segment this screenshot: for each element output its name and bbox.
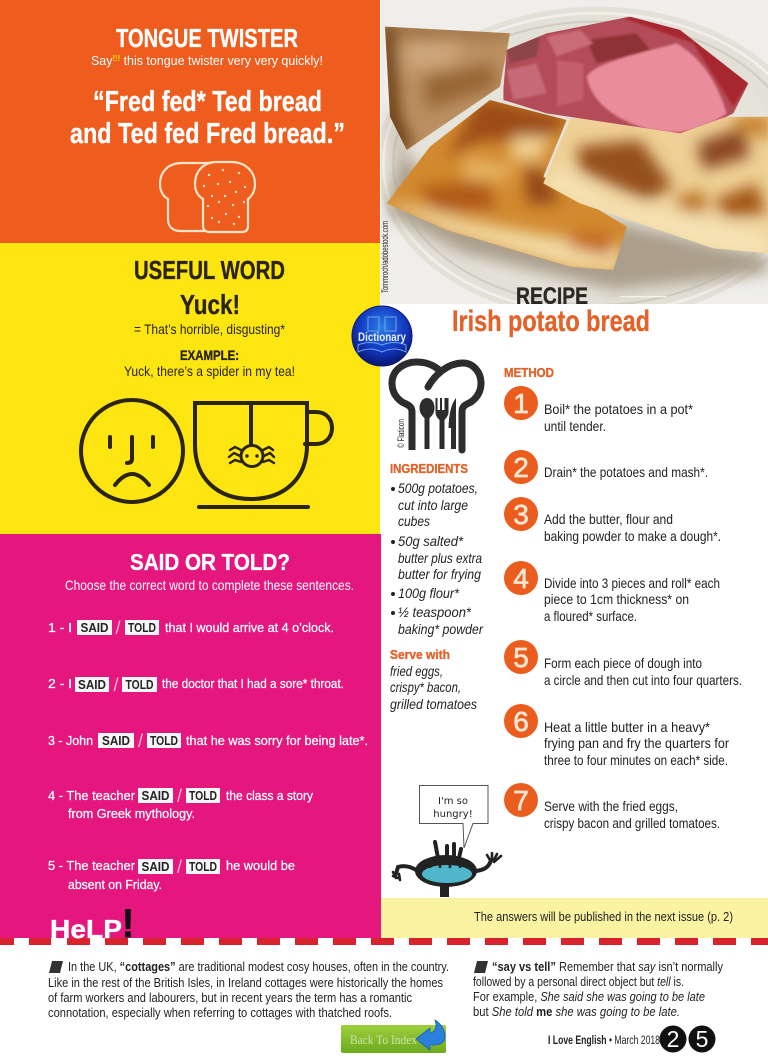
panel: method	[504, 365, 742, 831]
ingredient list: butter for frying	[398, 566, 481, 582]
sentence 1	[48, 618, 334, 638]
heading: ingredients: INGREDIENTS	[390, 461, 468, 476]
panel: tongue twister	[0, 0, 380, 243]
recipe label: RECIPE	[516, 283, 588, 310]
serve with: fried eggs,	[390, 663, 443, 679]
step 1	[504, 386, 693, 434]
sentence 4: /	[177, 786, 182, 806]
word: yuck: Yuck!	[180, 289, 240, 320]
photo: irish potato bread with bacon and toast	[377, 0, 768, 320]
fork	[436, 398, 448, 449]
step 4: a floured* surface.	[544, 608, 637, 624]
bacon	[497, 13, 753, 137]
footnote: cottages: connotation, especially when referring to cottages with thatched roofs.	[48, 1005, 392, 1020]
sentence 2: TOLD	[126, 678, 154, 692]
step 7: 7	[513, 785, 529, 816]
panel: ingredients	[390, 461, 484, 712]
spoon	[420, 398, 434, 449]
monster character	[393, 842, 501, 897]
step 2	[504, 450, 708, 484]
footnote: cottages	[48, 959, 449, 1020]
step 7: Serve with the fried eggs,	[544, 798, 678, 814]
heading: tongue twister: TONGUE TWISTER	[116, 23, 298, 53]
footnote: say vs tell: but She told me she was going to be late.	[473, 1004, 680, 1019]
step 3: baking powder to make a dough*.	[544, 528, 721, 544]
step 6: 6	[513, 706, 529, 737]
bread right	[540, 113, 768, 257]
sentence 5: 5 - The teacher	[48, 858, 136, 873]
panel: said or told	[0, 534, 381, 938]
step 3	[504, 497, 721, 544]
sentence 1: 1 - I	[48, 620, 72, 635]
serve with: Serve with	[390, 647, 450, 662]
sentence 3: /	[138, 731, 143, 751]
photo credit: Tommroch/adobestock.com	[380, 221, 390, 293]
sentence 2: /	[113, 675, 119, 695]
icon: bread loaf	[160, 162, 255, 232]
instruction text: Say	[91, 53, 113, 68]
ingredient list: 500g potatoes,	[398, 480, 478, 496]
footnote: say vs tell	[473, 959, 723, 1019]
step 4: 4	[513, 563, 529, 594]
heading: method: METHOD	[504, 365, 554, 380]
knife	[448, 398, 456, 449]
sentence 1: TOLD	[128, 621, 156, 635]
sentence 2: 2 - I	[48, 676, 72, 691]
icon: book	[49, 961, 63, 973]
step 6: Heat a little butter in a heavy*	[544, 719, 710, 735]
step 5: 5	[513, 642, 529, 673]
sentence 3: that he was sorry for being late*.	[186, 733, 368, 748]
sentence 4: from Greek mythology.	[68, 806, 195, 821]
sentence 1: SAID	[80, 621, 108, 635]
page footer: I Love English • March 2018	[548, 1035, 660, 1047]
definition: = That’s horrible, disgusting*	[134, 321, 285, 337]
sentence 4: SAID	[142, 789, 170, 803]
sentence 5: he would be	[226, 858, 295, 873]
heading: useful word: USEFUL WORD	[134, 255, 285, 285]
answers note	[381, 898, 768, 938]
speech bubble	[420, 786, 488, 848]
help logo: HeLP	[50, 914, 122, 944]
step 5: Form each piece of dough into	[544, 655, 702, 671]
serve with	[390, 647, 477, 712]
dashed divider	[0, 938, 768, 945]
footnote: say vs tell: “say vs tell” Remember that say isn’t normally	[492, 959, 723, 974]
sentence 5: /	[177, 857, 182, 877]
ingredient list: 100g flour*	[398, 585, 459, 601]
sentence 3: 3 - John	[48, 733, 93, 748]
step 7	[504, 783, 720, 831]
sentence 1: /	[115, 618, 121, 638]
ingredient list	[391, 480, 484, 637]
step 1: Boil* the potatoes in a pot*	[544, 401, 693, 417]
sentence 4: TOLD	[189, 789, 217, 803]
sentence 3	[48, 731, 368, 751]
step 2: 2	[513, 452, 529, 483]
ingredient list: 50g salted*	[398, 533, 464, 549]
heading: said or told: SAID OR TOLD?	[130, 549, 290, 575]
help logo: !	[122, 902, 134, 946]
plate shadows	[380, 100, 768, 290]
step 6: three to four minutes on each* side.	[544, 752, 728, 768]
sentence 2	[48, 675, 344, 695]
icon: chef hat with cutlery	[392, 362, 481, 450]
step 3: Add the butter, flour and	[544, 511, 673, 527]
bread left	[386, 100, 626, 270]
sentence 4: 4 - The teacher	[48, 788, 136, 803]
step 2: Drain* the potatoes and mash*.	[544, 464, 708, 480]
speech bubble: hungry!	[433, 809, 473, 820]
step 4: Divide into 3 pieces and roll* each	[544, 575, 720, 591]
step 4: piece to 1cm thickness* on	[544, 591, 689, 607]
sentence 1: that I would arrive at 4 o’clock.	[165, 620, 334, 635]
tongue twister quote: and Ted fed Fred bread.”	[70, 118, 345, 150]
sentence 5: TOLD	[189, 860, 217, 874]
footnote: say vs tell: For example, She said she was going to be late	[473, 989, 705, 1004]
back to index button	[341, 1020, 446, 1053]
icon: disgusted face	[81, 400, 183, 502]
instructions: Choose the correct word to complete these sentences.	[65, 577, 354, 593]
instruction text: !!!	[112, 54, 120, 63]
sentence 2: the doctor that I had a sore* throat.	[162, 676, 344, 691]
serve with: grilled tomatoes	[390, 696, 477, 712]
toast	[385, 26, 510, 150]
sentence 4	[48, 786, 313, 821]
step 3: 3	[513, 499, 529, 530]
icon: dictionary badge	[352, 306, 412, 366]
sentence 5: absent on Friday.	[68, 877, 162, 892]
example: EXAMPLE:	[180, 347, 239, 363]
instruction text: this tongue twister very very quickly!	[120, 53, 323, 68]
serve with: crispy* bacon,	[390, 679, 461, 695]
tongue twister quote: “Fred fed* Ted bread	[93, 86, 322, 118]
help logo	[50, 902, 134, 946]
step 6: frying pan and fry the quarters for	[544, 735, 729, 751]
step 5	[504, 640, 742, 688]
page number	[660, 1026, 716, 1052]
back to index button: Back To Index	[350, 1032, 417, 1047]
step 6	[504, 704, 729, 768]
icon: blue arrow	[416, 1020, 445, 1050]
example: Yuck, there’s a spider in my tea!	[124, 363, 295, 379]
sentence 4: the class a story	[226, 788, 313, 803]
step 7: crispy bacon and grilled tomatoes.	[544, 815, 720, 831]
sentence 2: SAID	[78, 678, 106, 692]
footnote: cottages: In the UK, “cottages” are traditional modest cosy houses, often in the country.	[68, 959, 449, 974]
tongue twister quote	[70, 86, 345, 150]
ingredient list: ½ teaspoon*	[398, 604, 472, 620]
panel: useful word	[0, 243, 380, 534]
page number: 2	[667, 1026, 679, 1052]
ingredient list: baking* powder	[398, 621, 484, 637]
icon: spider	[229, 446, 274, 466]
sentence 3: SAID	[102, 734, 130, 748]
footnote: say vs tell: followed by a personal direct object but tell is.	[473, 974, 684, 989]
ingredient list: cut into large	[398, 497, 468, 513]
ingredient list: butter plus extra	[398, 550, 482, 566]
step 1: 1	[513, 388, 529, 419]
page footer	[548, 1026, 716, 1052]
sentence 5: SAID	[142, 860, 170, 874]
footnote: cottages: Like in the rest of the British Isles, in Ireland cottages were historically the homes	[48, 975, 443, 990]
step 1: until tender.	[544, 418, 606, 434]
ingredient list: cubes	[398, 513, 430, 529]
icon: cup with spider	[195, 403, 332, 507]
sentence 3: TOLD	[150, 734, 178, 748]
step 4	[504, 561, 720, 624]
sentence 5	[48, 857, 295, 892]
flaticon credit: © Flaticon	[396, 419, 406, 448]
page number: 5	[696, 1026, 708, 1052]
speech bubble: I'm so	[438, 796, 468, 807]
icon: book	[474, 961, 488, 973]
recipe title: Irish potato bread	[452, 305, 650, 338]
footnote: cottages: of farm workers and labourers, but in recent years the term has a romantic	[48, 990, 412, 1005]
example	[124, 347, 295, 379]
icon: dictionary badge: Dictionary	[358, 332, 407, 344]
